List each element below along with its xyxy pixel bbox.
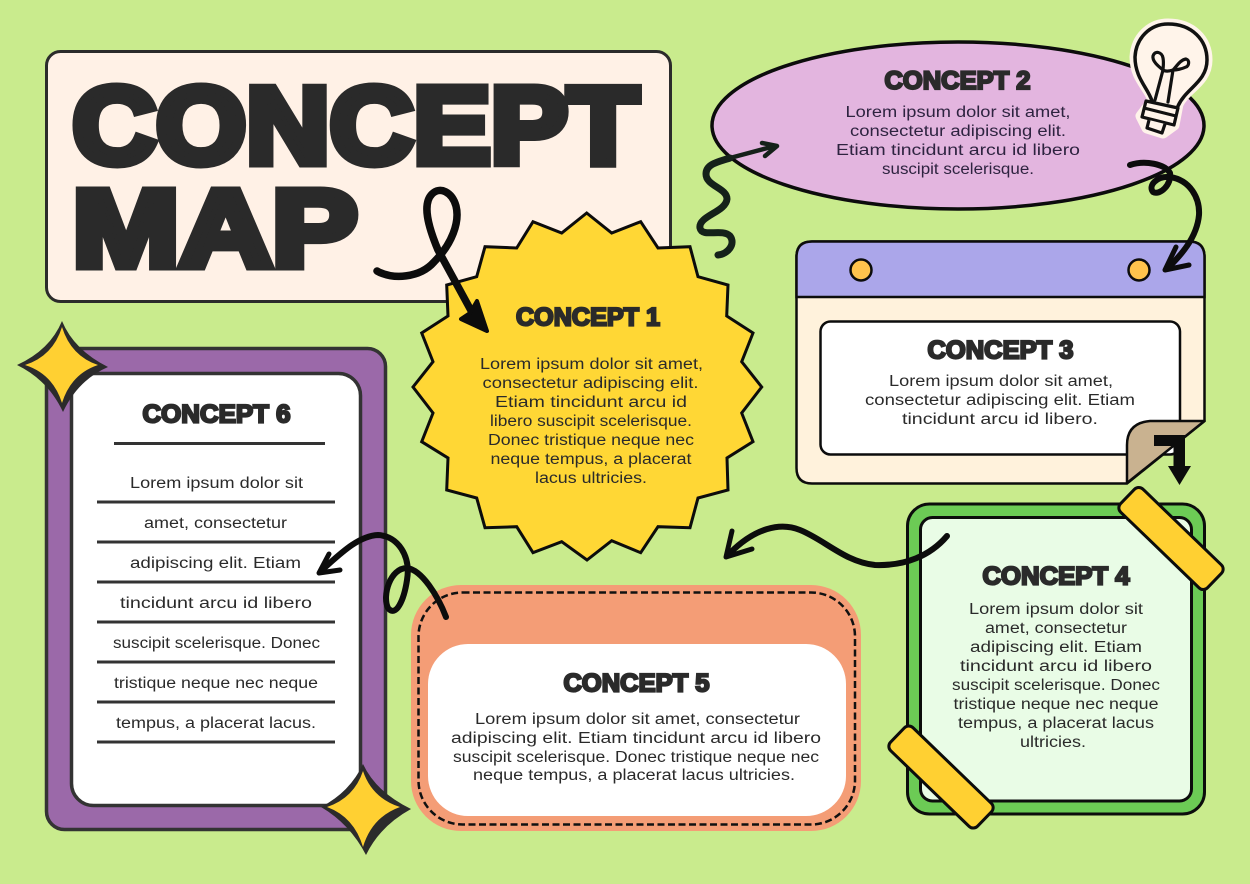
panel: concept 3: tincidunt arcu id libero. [902, 411, 1098, 428]
panel: concept 6: amet, consectetur [144, 515, 287, 532]
panel: concept 2: suscipit scelerisque. [882, 161, 1034, 178]
panel: concept 5: adipiscing elit. Etiam tincidunt arcu id libero [451, 730, 821, 747]
panel: concept 2: consectetur adipiscing elit. [850, 123, 1066, 140]
panel: concept 6: tempus, a placerat lacus. [116, 715, 316, 732]
icon: star top left [17, 321, 108, 412]
panel: concept 1: libero suscipit scelerisque. [490, 413, 692, 430]
panel: concept 3 [796, 242, 1204, 484]
panel: concept 5 [411, 585, 861, 831]
tape: top [1116, 485, 1226, 592]
panel: concept 4: suscipit scelerisque. Donec [952, 677, 1160, 694]
window header [796, 242, 1204, 297]
panel: concept 1: CONCEPT 1 [516, 304, 660, 332]
panel: concept 3: consectetur adipiscing elit. Etiam [865, 392, 1135, 409]
panel: concept 5: suscipit scelerisque. Donec tristique neque nec [453, 749, 819, 766]
panel: concept 1: consectetur adipiscing elit. [482, 375, 698, 392]
panel: concept 2 [712, 42, 1204, 209]
folded corner [1127, 421, 1204, 483]
title [72, 65, 638, 290]
panel: concept 3: CONCEPT 3 [928, 336, 1074, 364]
panel: concept 4: adipiscing elit. Etiam [970, 639, 1142, 656]
header dots [850, 260, 1150, 280]
panel: concept 2: CONCEPT 2 [884, 67, 1030, 95]
inner card [820, 322, 1180, 454]
panel: concept 1: lacus ultricies. [535, 470, 647, 487]
panel: concept 4: amet, consectetur [985, 620, 1127, 637]
panel: concept 4: tristique neque nec neque [954, 696, 1158, 713]
panel: concept 1: Etiam tincidunt arcu id [495, 394, 687, 411]
panel: concept 5: CONCEPT 5 [564, 670, 710, 698]
arrow: concept 1 to 2 [700, 143, 777, 255]
tape: bottom [886, 723, 996, 831]
panel: concept 6: CONCEPT 6 [142, 400, 290, 428]
panel: concept 1 [413, 213, 762, 560]
icon: light bulb [1135, 24, 1207, 133]
icon: star bottom right [321, 764, 411, 855]
panel: concept 3: Lorem ipsum dolor sit amet, [889, 373, 1113, 390]
ruled lines [97, 444, 335, 742]
panel: concept 1: Lorem ipsum dolor sit amet, [480, 356, 703, 373]
panel: concept 4: tincidunt arcu id libero [960, 658, 1152, 675]
panel: concept 4: Lorem ipsum dolor sit [969, 601, 1144, 618]
panel: concept 6: tincidunt arcu id libero [120, 595, 312, 612]
panel: concept 6: adipiscing elit. Etiam [130, 555, 301, 572]
title: MAP [72, 168, 358, 290]
panel: concept 5: neque tempus, a placerat lacus ultricies. [473, 767, 795, 784]
title: CONCEPT [72, 65, 638, 187]
panel: concept 4 [908, 504, 1204, 814]
panel: concept 5: Lorem ipsum dolor sit amet, consectetur [475, 711, 800, 728]
panel: concept 4: CONCEPT 4 [982, 562, 1130, 590]
panel: concept 2: Etiam tincidunt arcu id libero [836, 142, 1080, 159]
panel: concept 6 [46, 348, 386, 830]
panel: concept 1: neque tempus, a placerat [490, 451, 692, 468]
arrow: title to concept 1 [377, 190, 487, 331]
arrow: concept 2 to 3 [1130, 163, 1199, 270]
panel: concept 2: Lorem ipsum dolor sit amet, [846, 104, 1070, 121]
panel: concept 4: tempus, a placerat lacus [958, 715, 1154, 732]
arrow: concept 4 to 5 [726, 527, 947, 565]
arrow: concept 5 to 6 [319, 535, 446, 617]
panel: concept 6: suscipit scelerisque. Donec [113, 635, 320, 652]
panel: concept 6: tristique neque nec neque [114, 675, 318, 692]
title panel [46, 52, 670, 302]
panel: concept 1: Donec tristique neque nec [488, 432, 694, 449]
panel: concept 6: Lorem ipsum dolor sit [130, 475, 304, 492]
arrow: concept 3 to 4 [1154, 435, 1191, 485]
panel: concept 4: ultricies. [1020, 734, 1086, 751]
